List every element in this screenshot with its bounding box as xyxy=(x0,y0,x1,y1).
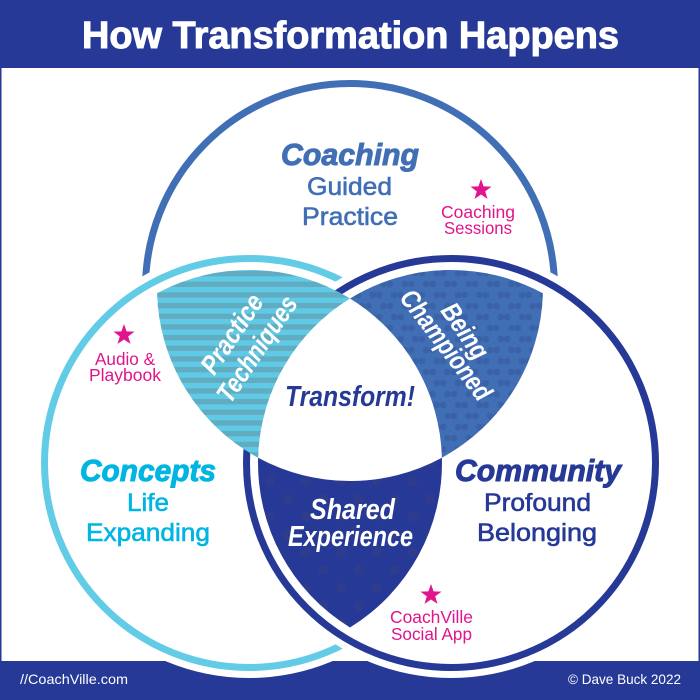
label: practice: Practice xyxy=(194,288,270,380)
subheading: belonging: Belonging xyxy=(477,519,597,547)
overlap: shared experience xyxy=(258,458,442,628)
callout: audio and playbook xyxy=(89,324,161,385)
text block: concepts xyxy=(80,453,216,547)
overlap: being championed xyxy=(350,270,543,458)
icon: star xyxy=(420,584,442,604)
overlap: practice techniques xyxy=(150,270,360,458)
label: being: Being xyxy=(435,297,495,365)
heading: concepts: Concepts xyxy=(80,453,216,488)
title: How Transformation Happens xyxy=(82,15,619,57)
label: experience: Experience xyxy=(288,521,413,553)
text block: community xyxy=(455,453,623,547)
footer text left: //CoachVille.com xyxy=(20,671,128,687)
title banner xyxy=(0,0,700,68)
subheading: life: Life xyxy=(127,489,169,517)
text: playbook: Playbook xyxy=(89,365,161,385)
text block: coaching xyxy=(281,137,419,231)
text: sessions: Sessions xyxy=(444,218,512,238)
footer text right: © Dave Buck 2022 xyxy=(568,671,681,687)
heading: coaching: Coaching xyxy=(281,137,419,172)
footer band xyxy=(0,661,700,700)
text: coaching: Coaching xyxy=(441,202,515,222)
label: techniques: Techniques xyxy=(210,290,304,408)
text: coachville: CoachVille xyxy=(390,607,473,627)
callout: coachville social app xyxy=(390,584,473,644)
icon: star xyxy=(470,179,492,199)
text: social app: Social App xyxy=(391,624,472,644)
label: shared: Shared xyxy=(310,494,396,526)
circle: community xyxy=(236,248,666,678)
center label: transform: Transform! xyxy=(285,381,415,413)
subheading: guided: Guided xyxy=(307,173,392,201)
subheading: profound: Profound xyxy=(484,489,591,517)
circle: concepts xyxy=(34,248,464,678)
label: championed: Championed xyxy=(394,284,498,407)
text: audio: Audio & xyxy=(95,349,155,369)
heading: community: Community xyxy=(455,453,623,488)
subheading: expanding: Expanding xyxy=(86,519,210,547)
icon: star xyxy=(114,324,134,344)
subheading: practice: Practice xyxy=(302,203,398,231)
circle: coaching xyxy=(146,84,554,492)
callout: coaching sessions xyxy=(441,179,515,238)
